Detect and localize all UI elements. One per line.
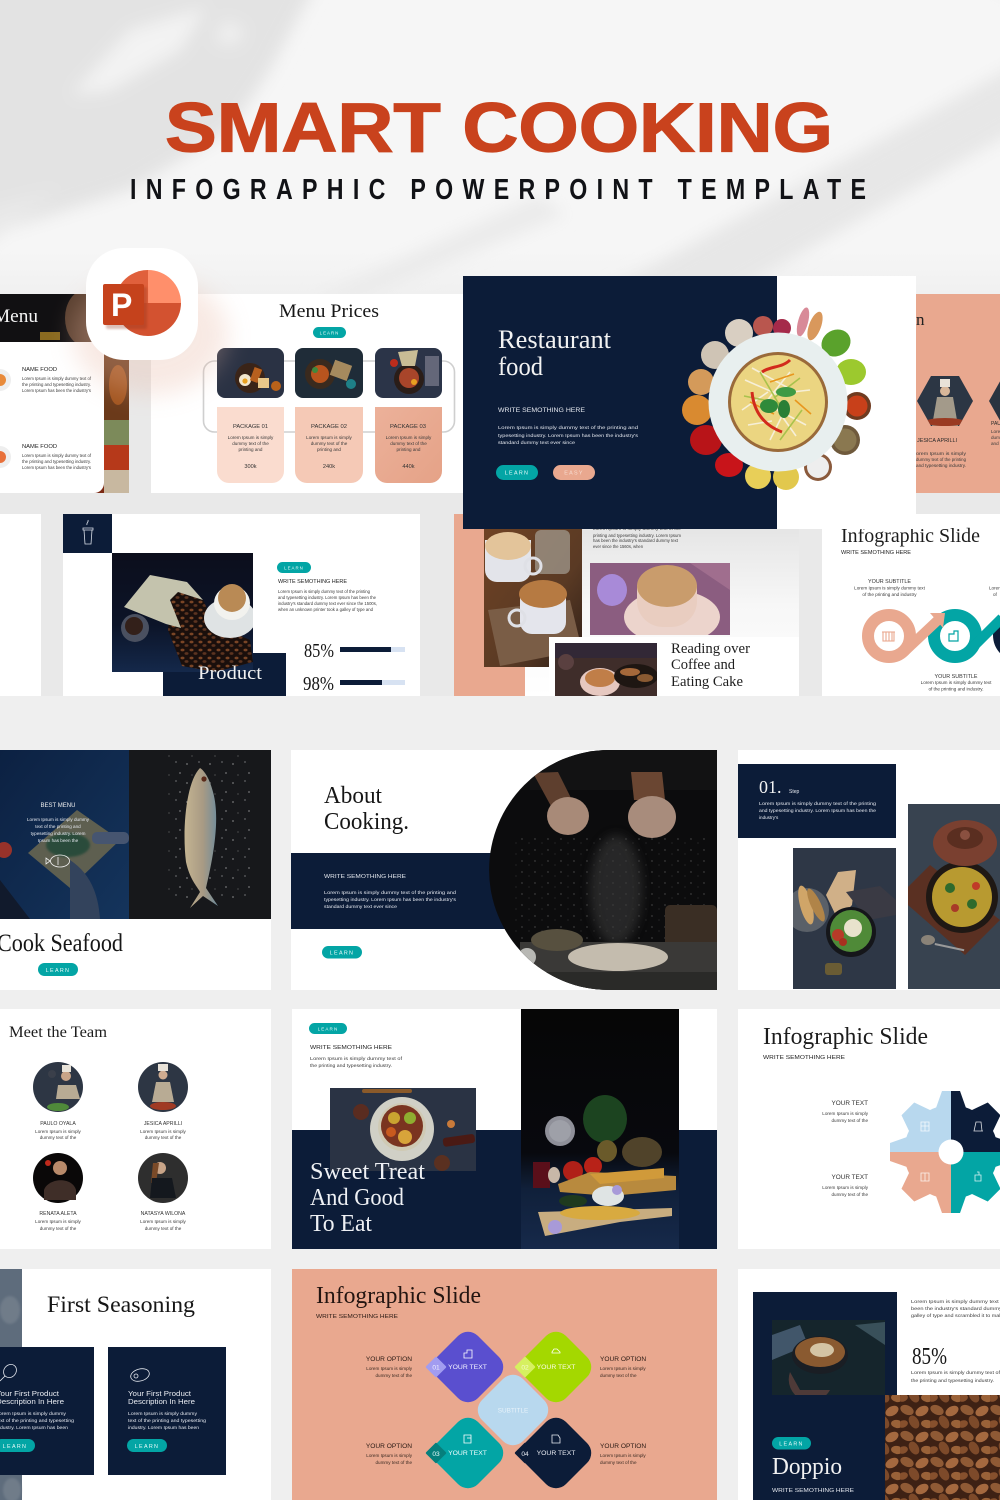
caption 2: YOUR SUBTITLE [934,674,978,680]
member: Natasya Wilona: NATASYA WILONA [141,1211,186,1217]
product text: WRITE SEMOTHING HERE [278,579,347,585]
portrait: hexagon chef [917,376,973,426]
menu item 1: Lorem Ipsum has been the industry's [22,388,92,393]
member: Natasya Wilona: dummy text of the [145,1226,182,1231]
learn pill [277,562,311,573]
slide: diamond infographic on salmon: WRITE SEMOTHING HERE [316,1314,398,1320]
band text [324,874,457,909]
slide: about cooking [291,750,720,990]
text block: WRITE SEMOTHING HERE [310,1045,392,1051]
card 2: industry. Lorem Ipsum has been [128,1425,199,1430]
heading: food [498,352,543,381]
slide: reading over coffee [454,514,799,696]
best menu text: typesetting industry. Lorem [31,831,86,836]
heading: Sweet Treat [310,1159,425,1185]
slide: infographic loop (cropped right): of [993,592,998,597]
caption 1 [854,579,926,597]
learn pill: LEARN [779,1442,804,1448]
option label 4 [600,1443,646,1465]
icon: fish [46,855,70,867]
label 1: Lorem Ipsum is simply [822,1111,869,1116]
option label 4: dummy text of the [600,1460,637,1465]
menu item 2 [0,444,92,470]
heading: Menu Prices [279,301,379,322]
photo: package 2 [295,348,363,398]
diamond 03 [425,1412,509,1494]
price card 1: printing and [238,447,263,452]
price card 3 [375,407,442,483]
feature text [498,407,639,445]
heading: Cooking. [324,809,409,835]
learn pill: LEARN [284,566,304,570]
photo: coffee beans [885,1395,1000,1500]
band text: Lorem Ipsum is simply dummy text of the printing and [324,890,457,895]
member: Renata Aleta [33,1153,83,1231]
loop: navy ring [999,614,1000,656]
step box: 01. [759,777,782,797]
heading: First Seasoning [47,1292,196,1317]
card 2: LEARN [135,1444,159,1450]
price card 3: printing and [396,447,421,452]
slide: team on salmon (cropped right): and typesetting industry. [916,463,966,468]
member: Paulo Oyala [33,1062,83,1140]
doppio text: galley of type and scrambled it to make [911,1313,1000,1318]
feature text: typesetting industry. Lorem Ipsum has been the industry's [498,433,639,438]
icon: PowerPoint app: P [111,287,132,323]
heading: reading over coffee: Coffee and [671,657,735,673]
step box [738,764,896,838]
learn pill: LEARN [505,470,529,476]
icon: store [882,632,895,641]
diamond 01: YOUR TEXT [448,1364,487,1371]
slide: infographic loop (cropped right): WRITE SEMOTHING HERE [841,550,911,556]
doppio text: been the industry's standard dummy t [911,1306,1000,1311]
stat 85%: 85% [912,1344,947,1370]
card 2: Description In Here [128,1399,195,1406]
member: Jesica Aprilli: dummy text of the [145,1135,182,1140]
heading: Meet the Team [9,1024,108,1041]
card 2: text of the printing and typesetting [128,1418,207,1423]
illustration: vegetables around plate [682,306,871,490]
slide: sweet treat [292,1009,717,1249]
slide: diamond infographic on salmon [292,1269,717,1500]
label 1: YOUR TEXT [832,1100,868,1107]
center diamond: SUBTITLE [498,1408,528,1414]
heading: reading over coffee: Reading over [671,641,750,657]
slide: team on salmon (cropped right): orem Ipsum is simply [916,451,967,456]
photo: hands sifting flour [480,750,720,990]
card 2 [108,1347,226,1475]
option label 3: YOUR OPTION [366,1443,412,1450]
heading: Cook Seafood [0,930,123,957]
learn pill: LEARN [318,1026,338,1032]
slide: menu prices [151,294,481,493]
slide: doppio (cropped right) [738,1269,1000,1500]
diamond 01: 01 [432,1364,440,1372]
photo: two coffee cups [484,529,582,667]
heading [498,325,612,381]
label 1: dummy text of the [831,1118,868,1123]
heading: About [324,783,382,809]
price card 1: 300k [244,464,257,470]
icon: box [949,631,958,641]
option label 4: Lorem Ipsum is simply [600,1453,646,1458]
easy pill: EASY [564,470,584,476]
price card 3: PACKAGE 03 [390,424,426,430]
product text [278,579,377,612]
diamond 02: YOUR TEXT [537,1364,575,1371]
learn pill [313,327,346,338]
price card 2: PACKAGE 02 [311,424,347,430]
caption 1: Lorem Ipsum is simply dummy text [854,586,926,590]
label 2: dummy text of the [831,1192,868,1197]
diamond 01 [425,1326,509,1408]
member: Paulo Oyala: PAULO OYALA [40,1121,76,1127]
icon: PowerPoint app [72,248,228,395]
band text: standard dummy text ever since [324,904,397,909]
diamond 04 [514,1412,597,1494]
member: Natasya Wilona: Lorem Ipsum is simply [140,1219,187,1224]
label 1 [822,1100,869,1123]
option label 3 [366,1443,413,1465]
menu item 2: Lorem Ipsum has been the industry's [22,465,92,470]
diamond 04: YOUR TEXT [537,1450,575,1457]
slide: cook seafood [0,750,271,990]
step box: Step [789,789,800,795]
member: Renata Aleta: dummy text of the [40,1226,77,1231]
heading: Infographic Slide [841,526,980,547]
heading [324,783,409,835]
option label 1: YOUR OPTION [366,1356,412,1363]
card 1 [0,1347,94,1475]
price card 2: dummy text of the [311,441,348,446]
label 2 [822,1174,869,1197]
photo: chopping board [0,750,129,919]
diamond 03: 03 [432,1451,440,1458]
price card 1: Lorem Ipsum is simply [228,435,274,440]
price card 2 [295,407,363,483]
heading: Restaurant [498,325,612,354]
navy icon tile with cup [63,514,112,553]
price card 1: dummy text of the [232,441,269,446]
option label 4: YOUR OPTION [600,1443,646,1450]
subtitle: INFOGRAPHIC POWERPOINT TEMPLATE [130,172,866,206]
label 2: YOUR TEXT [832,1174,868,1181]
step box: and typesetting industry. Lorem Ipsum has been the [759,808,876,813]
option label 3: dummy text of the [375,1460,412,1465]
slide: meet the team [0,1009,271,1249]
card 1: LEARN [3,1444,27,1450]
slide: infographic loop (cropped right) [822,514,1000,696]
doppio text: Lorem Ipsum is simply dummy text of [911,1299,1000,1304]
product text: industry's standard dummy text ever since the 1500s, [278,601,377,606]
slide: first seasoning [0,1269,271,1500]
slide: menu (cropped left) [0,290,129,493]
stat 85%: the printing and typesetting industry. [911,1378,994,1383]
option label 1: Lorem Ipsum is simply [366,1366,413,1371]
learn pill [772,1437,811,1450]
center diamond [472,1369,554,1451]
step box: industry's [759,815,779,820]
product text: when an unknown printer took a galley of type and [278,607,373,612]
learn pill: LEARN [46,968,70,974]
product text: Lorem Ipsum is simply dummy text of the printing [278,589,370,594]
member: Jesica Aprilli: JESICA APRILLI [144,1121,182,1127]
slide: team on salmon (cropped right): n [916,310,925,329]
price card 3: dummy text of the [390,441,427,446]
diamond 03: YOUR TEXT [448,1450,487,1457]
coffee text: Lorem Ipsum is simply dummy text of the [593,526,681,531]
slide: step 01 (cropped right) [738,750,1000,990]
best menu text [27,803,90,843]
menu item 2: the printing and typesetting industry. [22,459,91,464]
loop: teal ring with arrow [934,615,1000,657]
member: Paulo Oyala: Lorem Ipsum is simply [35,1129,82,1134]
member: Paulo Oyala: dummy text of the [40,1135,77,1140]
learn pill [38,963,78,976]
menu item 1: NAME FOOD [22,367,57,373]
heading: Doppio [772,1454,842,1480]
caption 2 [921,674,992,692]
learn pill [322,946,362,958]
text block: Lorem Ipsum is simply dummy text of [310,1056,403,1061]
option label 3: Lorem Ipsum is simply [366,1453,413,1458]
photo: salad bowl [785,848,896,989]
coffee text: ever since the 1560s, when [593,544,643,549]
option label 1: dummy text of the [375,1373,412,1378]
member: Renata Aleta: Lorem Ipsum is simply [35,1219,82,1224]
photo: table spread [521,1009,679,1249]
learn pill: LEARN [330,950,354,956]
best menu text: text of the printing and [35,824,81,829]
stat 85%: Lorem Ipsum is simply dummy text of [911,1370,1000,1375]
member: Jesica Aprilli: Lorem Ipsum is simply [140,1129,187,1134]
slide: restaurant food (feature) [463,276,916,529]
photo: coffee beans sack [112,553,256,672]
diamond 04: 04 [521,1451,529,1458]
feature text: standard dummy text ever since [498,440,576,445]
text block: the printing and typesetting industry. [310,1063,392,1068]
product text: and typesetting industry. Lorem Ipsum has been the [278,595,376,600]
navy label block [163,653,286,696]
slide: team on salmon (cropped right): dummy text of the printing [916,457,966,462]
coffee text [593,526,681,549]
stat 98% [303,673,405,695]
navy band [291,853,521,929]
navy band [292,1130,717,1249]
slide: product [63,514,420,696]
heading: To Eat [310,1211,372,1237]
label: Product: Product [198,663,263,684]
slide: white sliver [0,514,41,696]
photo: latte in hands [772,1320,885,1401]
heading: And Good [310,1185,404,1211]
member: Natasya Wilona [138,1153,188,1231]
card 2: Your First Product [128,1391,191,1398]
slide: team on salmon (cropped right) [916,294,1000,493]
caption 2: of the printing and industry. [928,686,984,692]
gear icons [921,1122,983,1181]
coffee text: has been the industry's standard dummy text [593,538,679,543]
price card 1 [217,407,284,483]
coffee text: printing and typesetting industry. Lorem Ipsum [593,533,681,538]
slide: doppio (cropped right): WRITE SEMOTHING HERE [772,1488,854,1494]
chart: gear quadrants [890,1091,1000,1213]
photo: pasta pot [908,804,1000,989]
photo: coffee and cookies [555,643,658,696]
option label 2: dummy text of the [600,1373,637,1378]
slide: team on salmon (cropped right): JESICA APRILLI [917,438,957,444]
heading: reading over coffee [671,641,750,690]
photo: package 1 [217,348,284,398]
slide: gear infographic (cropped right): WRITE SEMOTHING HERE [763,1055,845,1061]
band text: WRITE SEMOTHING HERE [324,874,406,880]
menu item 1: the printing and typesetting industry. [22,382,91,387]
stat 85% [304,640,405,662]
text block [310,1045,403,1068]
price card 2: Lorem Ipsum is simply [306,435,353,440]
learn pill [496,465,538,480]
caption 1: YOUR SUBTITLE [868,579,911,585]
member: Jesica Aprilli [138,1062,188,1140]
connecting frame [204,361,454,432]
navy panel [753,1292,897,1500]
stone texture strip [0,1269,22,1500]
stat 98%: 98% [303,673,334,695]
photo: package 3 [375,348,442,398]
photo: plate of roast vegetables [330,1088,476,1171]
easy pill [553,465,595,480]
learn pill: LEARN [320,330,339,336]
step box: Lorem Ipsum is simply dummy text of the printing [759,801,877,806]
loop: salmon ring with arrow [868,613,945,657]
diamond 02: 02 [521,1364,529,1372]
portrait: hexagon 2 [989,382,1000,420]
best menu text: Lorem Ipsum is simply dummy [27,817,90,822]
menu item 2: NAME FOOD [22,444,57,450]
label 2: Lorem Ipsum is simply [822,1185,869,1190]
heading: Infographic Slide [316,1283,481,1309]
menu item 2: Lorem Ipsum is simply dummy text of [22,453,92,458]
menu item 1 [0,367,92,393]
stat 85%: 85% [304,640,334,662]
heading: reading over coffee: Eating Cake [671,674,743,690]
price card 3: Lorem Ipsum is simply [386,435,432,440]
member: Renata Aleta: RENATA ALETA [39,1211,77,1217]
option label 2: Lorem Ipsum is simply [600,1366,646,1371]
best menu text: BEST MENU [41,803,75,809]
card 2: Lorem Ipsum is simply dummy [128,1411,198,1416]
illustration: plate of noodles [708,332,848,472]
price card 2: printing and [317,447,341,452]
title: SMART COOKING [165,88,833,166]
best menu text: Ipsum has been the [38,838,79,843]
doppio text [911,1299,1000,1318]
option label 2 [600,1356,646,1378]
caption 1: of the printing and industry [862,592,917,597]
price card 2: 240k [323,464,335,470]
heading: Infographic Slide [763,1024,928,1050]
feature text: Lorem Ipsum is simply dummy text of the printing and [498,425,639,430]
diamond 02 [514,1326,597,1408]
stat 85% [911,1344,1000,1383]
slide: gear infographic (cropped right) [738,1009,1000,1249]
photo: fish on slate [129,750,271,919]
feature text: WRITE SEMOTHING HERE [498,407,585,414]
band text: typesetting industry. Lorem Ipsum has been the industry's [324,897,457,902]
photo: latte and glasses [590,563,730,635]
option label 2: YOUR OPTION [600,1356,646,1363]
heading [310,1159,425,1237]
menu item 1: Lorem Ipsum is simply dummy text of [22,376,92,381]
caption 2: Lorem Ipsum is simply dummy text [921,680,992,685]
option label 1 [366,1356,413,1378]
price card 3: 440k [402,464,415,470]
learn pill [309,1023,347,1034]
white photo mat [549,637,799,696]
price card 1: PACKAGE 01 [233,424,268,430]
